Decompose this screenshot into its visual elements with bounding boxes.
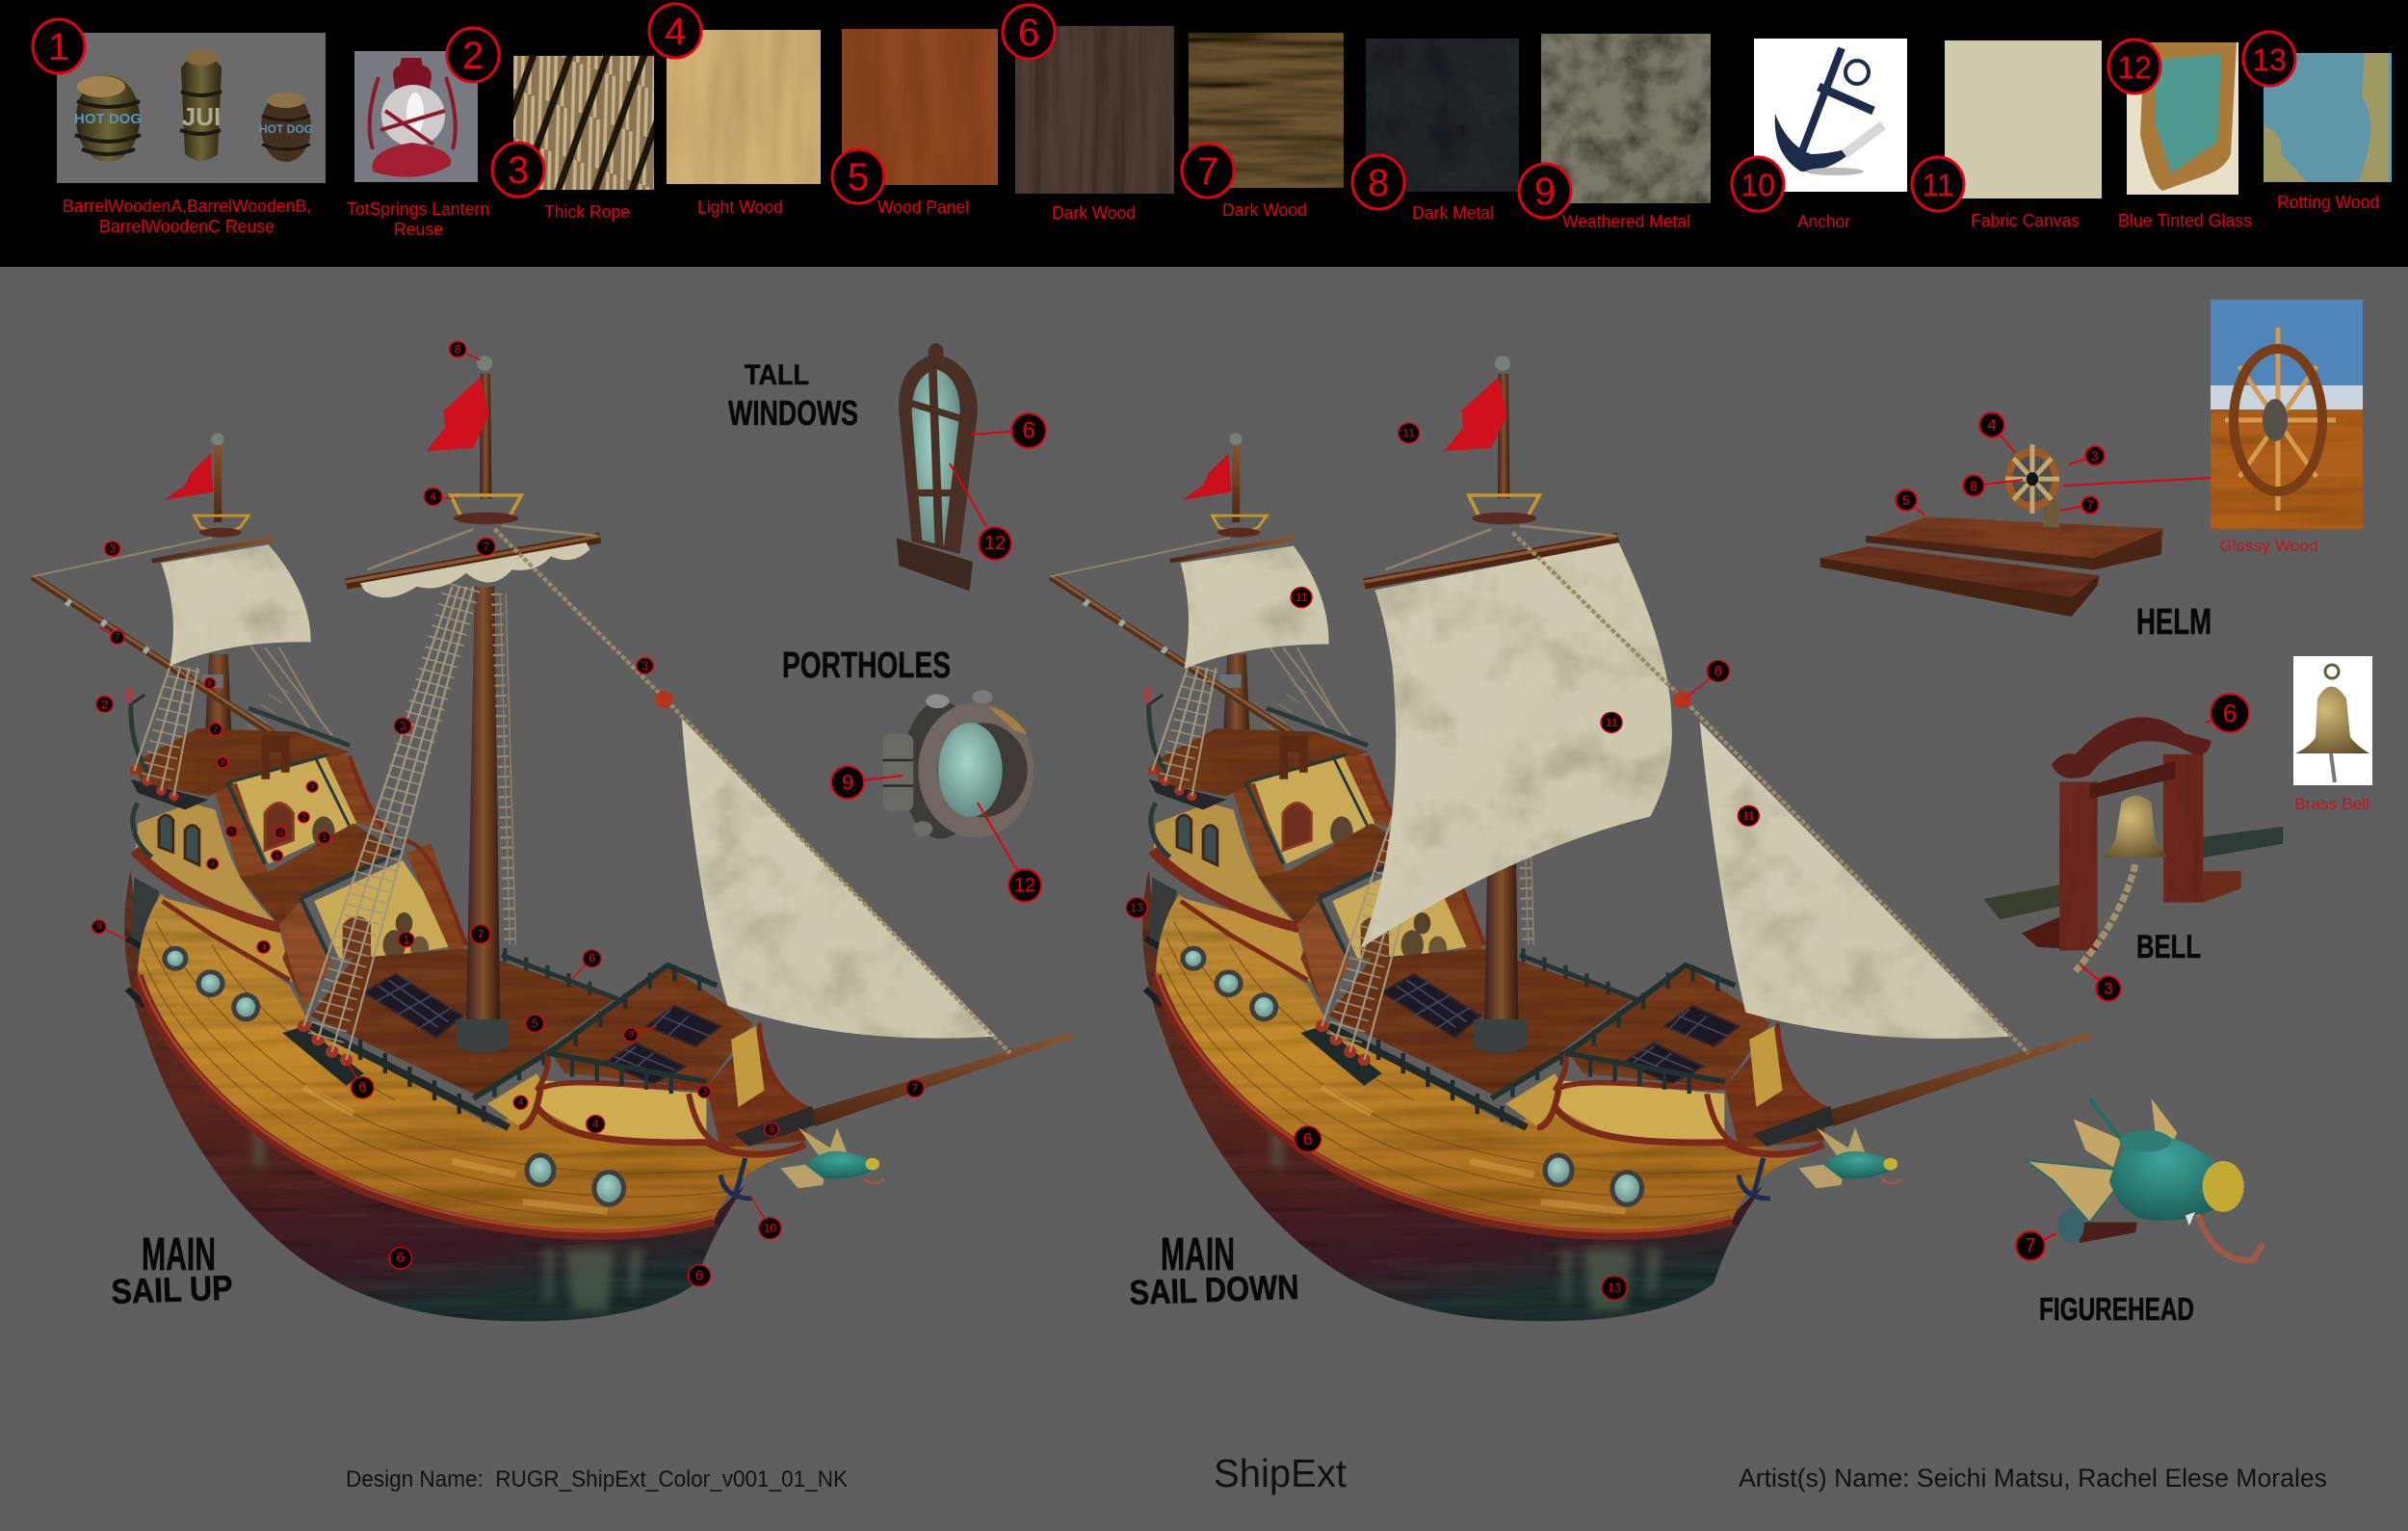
label: main sail up: SAIL UP xyxy=(111,1268,233,1311)
badge 8: 8 xyxy=(455,343,461,356)
badge 4 xyxy=(306,781,318,792)
number 10 xyxy=(1732,157,1784,211)
ship base model xyxy=(33,356,1075,1321)
badge 7 xyxy=(477,538,495,556)
badge 6: 6 xyxy=(2223,699,2237,727)
number 4: 4 xyxy=(665,11,686,53)
badge 3: 3 xyxy=(2091,448,2099,463)
badge 4 xyxy=(587,1116,605,1133)
badge 7: 7 xyxy=(911,1082,918,1095)
badge 10: 10 xyxy=(763,1222,777,1235)
badge 12 xyxy=(979,527,1011,560)
badge 13: 13 xyxy=(1608,1281,1621,1294)
number 13 xyxy=(2243,32,2295,86)
badge 8 xyxy=(275,828,286,838)
number 1: 1 xyxy=(48,26,69,68)
badge 11 xyxy=(1738,805,1759,826)
swatch: thick rope xyxy=(513,56,654,190)
badge 7 xyxy=(470,925,490,943)
red block xyxy=(1673,691,1691,708)
label: main sail down xyxy=(1129,1229,1299,1312)
badge 12: 12 xyxy=(1014,875,1035,896)
labels for swatches: Fabric Canvas xyxy=(1971,211,2080,230)
badge 7 xyxy=(209,724,222,735)
badge 3 xyxy=(637,657,653,673)
lowered main sail xyxy=(1361,542,1672,948)
ship: main sail down xyxy=(1051,356,2093,1321)
labels for swatches: Anchor xyxy=(1797,212,1850,231)
number 5 xyxy=(832,149,884,203)
number 12 xyxy=(2108,40,2160,93)
badge 11: 11 xyxy=(1402,427,1415,439)
ship base model xyxy=(1051,356,2093,1321)
badge 6 xyxy=(1011,413,1046,448)
badge 5 xyxy=(226,826,237,836)
badge 4 xyxy=(1979,412,2004,437)
badge 12 xyxy=(1008,869,1041,902)
label: tall windows: WINDOWS xyxy=(728,393,858,433)
badge 8: 8 xyxy=(769,1124,774,1135)
badge 12: 12 xyxy=(984,533,1006,554)
number 5: 5 xyxy=(848,156,869,198)
badge 6 xyxy=(1295,1126,1322,1151)
badge 8: 8 xyxy=(628,1030,634,1040)
badges ship 2 xyxy=(1126,423,1759,1300)
number 11: 11 xyxy=(1922,168,1954,202)
helm detail xyxy=(1819,412,2249,617)
labels for swatches xyxy=(63,193,2379,239)
badge 4: 4 xyxy=(261,942,266,952)
badge 8 xyxy=(92,920,106,934)
badge 3 xyxy=(698,1086,711,1097)
tall window detail xyxy=(897,343,1046,592)
badge 3 xyxy=(2085,446,2105,465)
badge 8 xyxy=(624,1028,638,1042)
number 13: 13 xyxy=(2252,42,2287,77)
badge 7: 7 xyxy=(115,632,120,643)
badge 4 xyxy=(207,858,219,869)
badge 6: 6 xyxy=(1303,1129,1313,1148)
badge 3: 3 xyxy=(641,659,648,673)
number 2: 2 xyxy=(462,35,484,77)
badge 6 xyxy=(688,1265,711,1286)
labels for swatches: BarrelWoodenA,BarrelWoodenB, xyxy=(63,197,311,216)
badge 8: 8 xyxy=(1970,478,1977,493)
porthole detail xyxy=(831,690,1041,902)
swatch: dark metal xyxy=(1366,39,1519,192)
badge 1: 1 xyxy=(322,832,327,842)
badge 3 xyxy=(105,541,120,556)
badge 1 xyxy=(318,831,330,843)
material reference strip xyxy=(0,0,2408,267)
number 4 xyxy=(649,4,701,58)
labels for swatches: BarrelWoodenC Reuse xyxy=(99,217,275,236)
badge 5 xyxy=(526,1015,544,1032)
badge 6 xyxy=(583,950,601,967)
swatch: wood panel xyxy=(842,29,998,185)
badge 8 xyxy=(1963,475,1984,496)
number 9: 9 xyxy=(1534,171,1556,213)
number 2 xyxy=(447,28,499,82)
badge 6 xyxy=(1707,660,1730,682)
badge 3: 3 xyxy=(400,720,406,732)
labels for swatches: Wood Panel xyxy=(877,198,969,217)
jib sail xyxy=(682,719,996,1039)
badge 6: 6 xyxy=(397,1250,405,1266)
label: main sail down: MAIN xyxy=(1161,1229,1235,1280)
badge 11 xyxy=(1601,712,1622,732)
swatch: barrels: HOT DOG xyxy=(74,111,142,127)
badge 7: 7 xyxy=(213,725,218,734)
label: portholes: PORTHOLES xyxy=(782,646,951,686)
number 7: 7 xyxy=(1197,150,1218,193)
footer: design name: Design Name: RUGR_ShipExt_Color_v001_01_NK xyxy=(346,1466,848,1492)
badge 11 xyxy=(1399,423,1420,443)
badge 8 xyxy=(765,1122,778,1136)
ship: main sail up xyxy=(33,341,1075,1321)
badge 4 xyxy=(257,941,270,953)
badge 5: 5 xyxy=(1902,492,1910,508)
badges ship 1 xyxy=(92,341,924,1286)
badge 7: 7 xyxy=(477,928,484,940)
swatch: anchor xyxy=(1754,39,1907,192)
badge 13 xyxy=(1126,898,1147,918)
badge 4 xyxy=(513,1095,528,1109)
badge 5: 5 xyxy=(532,1016,538,1030)
labels for swatches: Dark Wood xyxy=(1222,200,1307,220)
badge 3 xyxy=(394,718,411,734)
swatch: light wood xyxy=(667,30,821,184)
badge 1: 1 xyxy=(403,933,409,946)
swatch: dark wood xyxy=(1015,26,1174,194)
badge 13 xyxy=(1602,1276,1627,1300)
number 6: 6 xyxy=(1018,12,1039,54)
swatch: dark wood horizontal xyxy=(1189,33,1344,188)
badge 6 xyxy=(2211,694,2249,732)
swatch: fabric canvas xyxy=(1945,40,2102,198)
swatch: barrels: HOT DOG xyxy=(259,122,313,136)
badge 6 xyxy=(351,1077,374,1098)
number 1 xyxy=(33,19,85,73)
badge 2: 2 xyxy=(101,698,108,711)
badge 4 xyxy=(424,488,442,506)
badge 11: 11 xyxy=(1742,809,1755,823)
number 9 xyxy=(1519,164,1571,218)
labels for swatches: Dark Metal xyxy=(1412,203,1494,223)
labels for swatches: Thick Rope xyxy=(544,202,630,222)
badge 6: 6 xyxy=(1022,418,1035,443)
badge 8 xyxy=(449,341,466,357)
number 12: 12 xyxy=(2117,50,2152,85)
stern sail xyxy=(161,544,311,667)
bell detail xyxy=(1983,694,2283,1001)
labels for swatches: Blue Tinted Glass xyxy=(2118,211,2252,230)
caption: brass bell: Brass Bell xyxy=(2294,795,2369,813)
badge 6: 6 xyxy=(1714,663,1722,679)
caption: glossy wood: Glossy Wood xyxy=(2219,537,2318,555)
number 7 xyxy=(1182,144,1234,198)
labels for swatches: TotSprings Lantern xyxy=(347,199,489,219)
badge 4: 4 xyxy=(430,490,436,503)
label: main sail down: SAIL DOWN xyxy=(1129,1267,1299,1312)
forestay rope xyxy=(494,529,1010,1053)
number 11 xyxy=(1912,157,1964,211)
badge 11: 11 xyxy=(1606,716,1618,729)
badge 6 xyxy=(389,1247,412,1269)
badge 8: 8 xyxy=(96,921,102,932)
jib sail xyxy=(1700,722,2010,1039)
swatch: rotting wood xyxy=(2264,53,2392,182)
badge 4: 4 xyxy=(1987,416,1997,434)
swatch: weathered metal xyxy=(1541,34,1711,203)
number 3: 3 xyxy=(508,149,529,192)
labels for swatches: Reuse xyxy=(394,220,443,239)
badge 7: 7 xyxy=(2025,1235,2036,1256)
swatch: lantern xyxy=(354,51,478,182)
label: main sail up xyxy=(111,1229,233,1311)
badge 7 xyxy=(110,630,124,644)
swatch: barrels: JUI xyxy=(182,102,221,131)
number 10: 10 xyxy=(1741,168,1775,202)
number 8: 8 xyxy=(1368,162,1389,204)
furled main sail xyxy=(360,542,589,597)
reference photo: brass bell xyxy=(2293,656,2372,785)
badge 7 xyxy=(905,1079,924,1097)
badge 8: 8 xyxy=(278,828,283,837)
badge 3: 3 xyxy=(702,1087,707,1096)
badge 7 xyxy=(2016,1231,2045,1260)
badge 3 xyxy=(2096,976,2121,1001)
footer: title: ShipExt xyxy=(1214,1451,1348,1495)
badge 3: 3 xyxy=(109,542,116,555)
badge 6: 6 xyxy=(275,851,279,860)
label: figurehead: FIGUREHEAD xyxy=(2039,1291,2194,1327)
badge 6: 6 xyxy=(695,1268,703,1283)
number 6 xyxy=(1003,5,1055,59)
label: main sail up: MAIN xyxy=(142,1229,216,1280)
badge 7: 7 xyxy=(2086,497,2094,513)
badge 3: 3 xyxy=(2104,979,2113,998)
badge 6: 6 xyxy=(589,952,595,965)
labels for swatches: Weathered Metal xyxy=(1562,212,1690,231)
badge 4: 4 xyxy=(518,1097,524,1108)
badge 2 xyxy=(96,696,113,712)
badge 5 xyxy=(1896,489,1917,511)
badge 5: 5 xyxy=(229,827,234,836)
badge 4: 4 xyxy=(210,859,215,868)
badge 4: 4 xyxy=(592,1118,599,1131)
figurehead detail xyxy=(2016,1098,2264,1260)
badge 4: 4 xyxy=(310,782,315,791)
badge 7 xyxy=(2081,496,2099,514)
badge 9: 9 xyxy=(842,771,853,794)
label: tall windows xyxy=(728,359,858,433)
badge 1 xyxy=(399,932,414,947)
swatch: barrels xyxy=(57,33,326,183)
footer: artists: Artist(s) Name: Seichi Matsu, Rachel Elese Morales xyxy=(1739,1464,2327,1492)
badge 6 xyxy=(272,850,282,861)
labels for swatches: Rotting Wood xyxy=(2277,193,2379,212)
number 8 xyxy=(1352,155,1404,209)
swatch: blue tinted glass xyxy=(2127,42,2238,195)
badge 11: 11 xyxy=(1296,591,1308,604)
badge 8 xyxy=(217,757,228,768)
badge 6: 6 xyxy=(358,1080,367,1095)
red block xyxy=(655,691,673,708)
labels for swatches: Light Wood xyxy=(697,198,783,217)
badge 8: 8 xyxy=(207,678,212,688)
badge 2: 2 xyxy=(301,812,306,822)
badge 9 xyxy=(831,766,864,799)
label: helm: HELM xyxy=(2136,602,2212,643)
label: bell: BELL xyxy=(2136,929,2201,965)
forestay rope xyxy=(1512,533,2028,1053)
badge 11 xyxy=(1291,587,1312,608)
stern sail xyxy=(1181,546,1329,669)
labels for swatches: Dark Wood xyxy=(1052,203,1136,223)
label: tall windows: TALL xyxy=(745,359,809,391)
badge 10 xyxy=(759,1218,781,1239)
badge 7: 7 xyxy=(483,541,489,553)
badge 13: 13 xyxy=(1130,901,1143,914)
reference photo: glossy wood wheel xyxy=(2211,300,2363,529)
badge 8: 8 xyxy=(221,757,225,767)
number 3 xyxy=(492,143,544,197)
badge 2 xyxy=(298,811,309,823)
badge 8 xyxy=(204,678,216,689)
